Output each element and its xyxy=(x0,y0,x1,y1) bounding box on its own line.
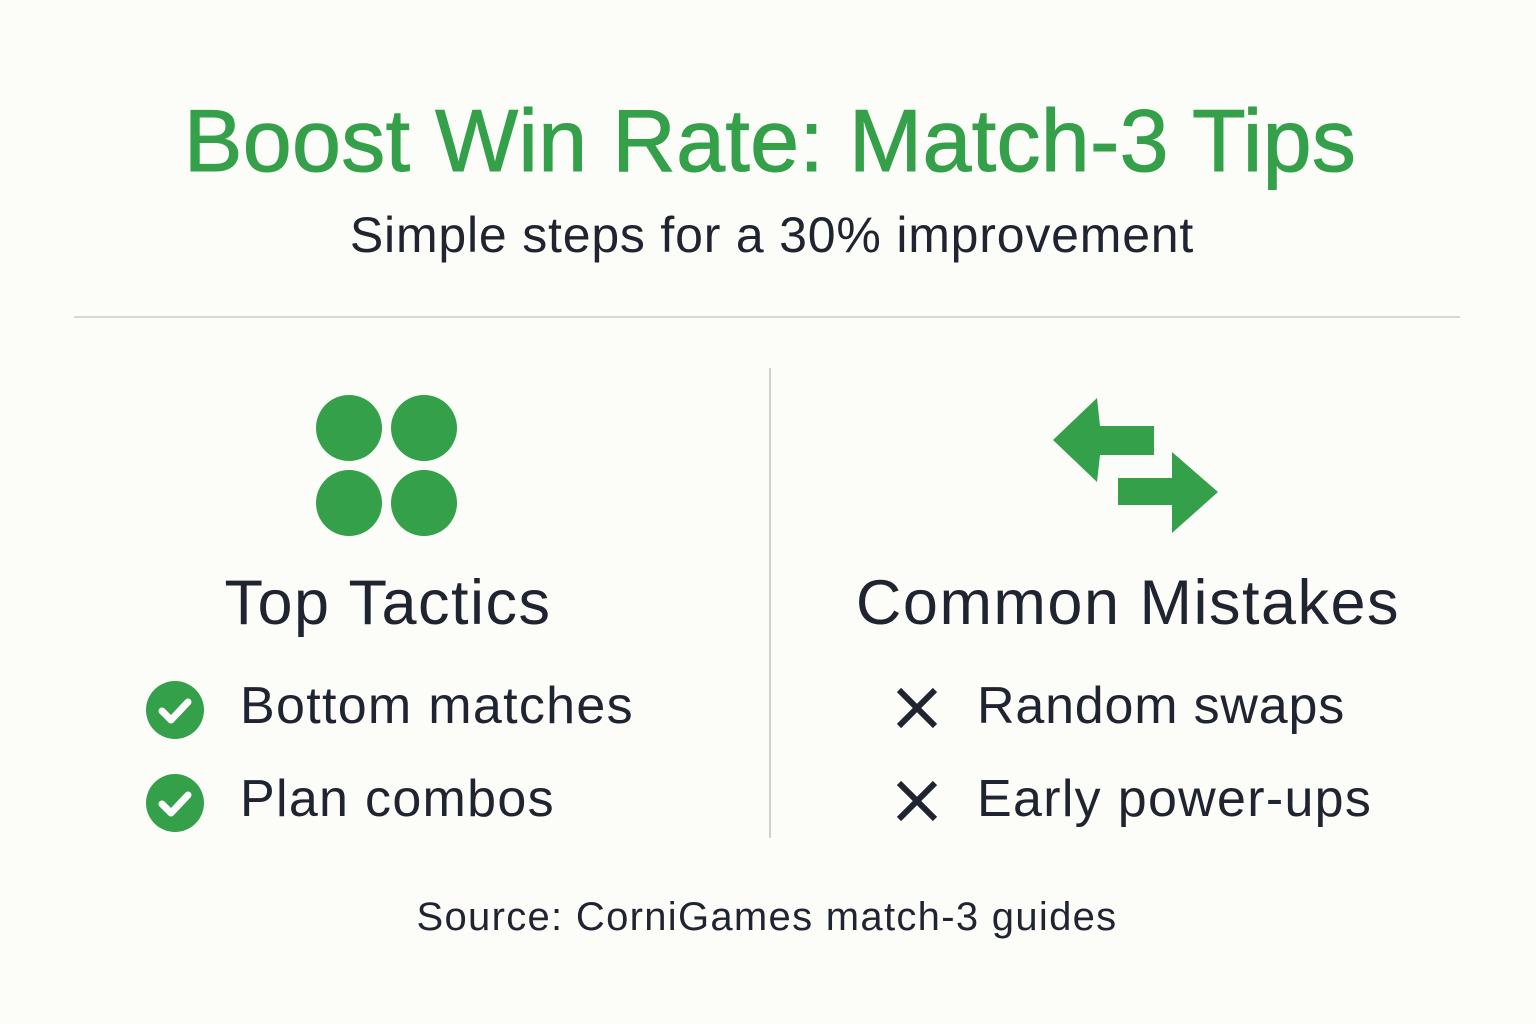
source: Source: CorniGames match-3 guides xyxy=(417,895,1117,939)
item: random swaps: Random swaps xyxy=(977,677,1345,735)
heading: common mistakes: Common Mistakes xyxy=(856,568,1400,638)
panel: top tactics xyxy=(146,395,634,832)
heading: top tactics: Top Tactics xyxy=(224,568,551,638)
icon: four dots xyxy=(316,395,457,536)
item: bottom matches: Bottom matches xyxy=(240,677,634,735)
item: plan combos: Plan combos xyxy=(240,770,555,828)
subtitle: Simple steps for a 30% improvement xyxy=(350,207,1194,263)
panel: common mistakes xyxy=(856,398,1400,828)
title: Boost Win Rate: Match-3 Tips xyxy=(184,91,1356,190)
item: early power-ups: Early power-ups xyxy=(977,770,1372,828)
icon: swap arrows xyxy=(1053,398,1218,533)
